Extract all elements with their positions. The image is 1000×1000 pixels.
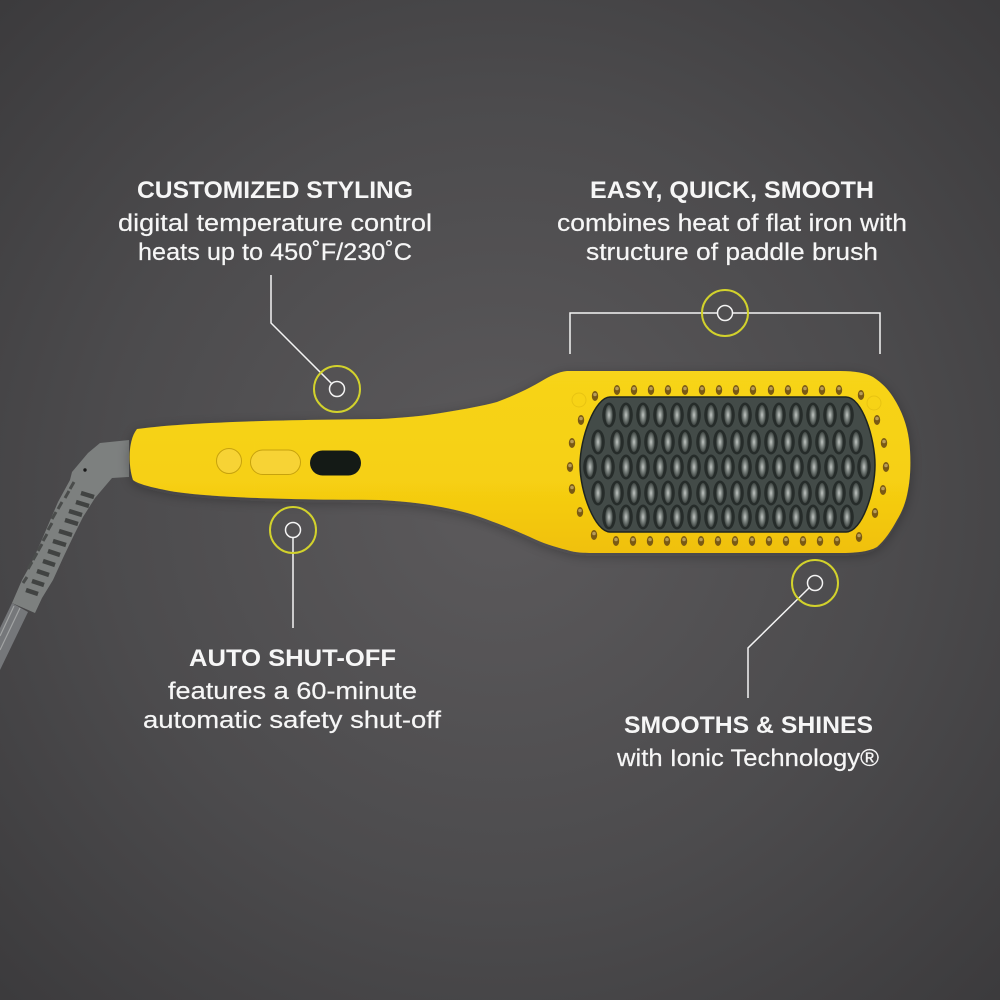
text: easy quick smooth: EASY, QUICK, SMOOTH (590, 177, 874, 204)
display window (310, 450, 361, 476)
text: auto shut-off (143, 645, 441, 734)
text: customized styling: digital temperature control (118, 210, 432, 237)
text: auto shut-off: automatic safety shut-off (143, 707, 441, 734)
ceramic plate (580, 397, 875, 532)
control: oval button (250, 450, 300, 474)
text: easy quick smooth (557, 177, 907, 266)
brush body (130, 371, 910, 553)
callout marker: paddle bracket (570, 290, 880, 354)
control: round button (216, 448, 242, 474)
corner marks (572, 393, 881, 410)
text: customized styling: CUSTOMIZED STYLING (137, 177, 413, 204)
text: easy quick smooth: combines heat of flat iron with (557, 210, 907, 237)
text: smooths and shines: with Ionic Technology® (616, 745, 879, 772)
text: auto shut-off: features a 60-minute (168, 678, 417, 705)
text: smooths and shines (616, 712, 879, 772)
bristle pins (567, 385, 889, 546)
callout marker: temperature control (271, 275, 360, 412)
text: auto shut-off: AUTO SHUT-OFF (189, 645, 396, 672)
text: customized styling (118, 177, 432, 266)
power cord (0, 603, 28, 670)
brush product (0, 371, 910, 670)
nodules (583, 402, 871, 530)
text: smooths and shines: SMOOTHS & SHINES (624, 712, 873, 739)
strain relief (12, 440, 129, 613)
callout marker: ionic technology (748, 560, 838, 698)
text: easy quick smooth: structure of paddle brush (586, 239, 878, 266)
callout marker: auto shut-off (270, 507, 316, 628)
text: customized styling: heats up to 450˚F/230˚C (138, 239, 412, 266)
